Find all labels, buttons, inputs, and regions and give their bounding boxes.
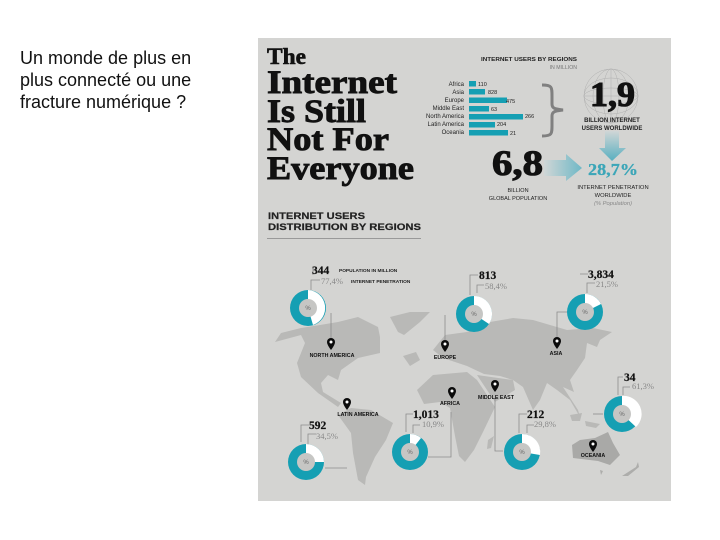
label: Asia stats: 3,834 (588, 269, 614, 281)
label: Middle East stats: 29,8% (534, 419, 556, 429)
donut: North America: % (305, 306, 311, 312)
title: Is Still (267, 94, 366, 130)
stat: 6,8 billion: GLOBAL POPULATION (489, 196, 547, 202)
region labels: North America (426, 114, 465, 120)
stat: 28,7%: INTERNET PENETRATION (577, 185, 649, 191)
stat: 6,8 billion: BILLION (507, 188, 529, 194)
label: Africa stats: 1,013 (413, 409, 439, 421)
bar values: 204 (497, 122, 506, 128)
pin: Oceania: OCEANIA (581, 453, 605, 459)
pin: Oceania (581, 440, 605, 459)
label: North America stats: POPULATION IN MILLION (339, 268, 398, 274)
stat: 28,7%: WORLDWIDE (595, 193, 631, 199)
title: Not For (267, 122, 389, 158)
stat: 28,7% (577, 160, 649, 207)
donut: Middle East: % (519, 450, 525, 456)
pin: Europe (434, 340, 457, 361)
text block: slide caption: Un monde de plus en (20, 48, 191, 68)
text block: slide caption: plus connecté ou une (20, 70, 191, 90)
pin: Africa: AFRICA (440, 401, 460, 407)
region labels: Latin America (428, 122, 465, 128)
pin: Middle East (478, 380, 515, 401)
pin: Asia (550, 337, 563, 357)
text block: slide caption (20, 48, 191, 112)
region labels: Africa (449, 82, 465, 88)
bar values: 266 (525, 114, 534, 120)
region labels (426, 82, 465, 136)
donut: Middle East (504, 434, 540, 470)
donut: Europe: % (471, 312, 477, 318)
stat: 1,9 billion (582, 75, 642, 132)
heading: distribution by regions: DISTRIBUTION BY REGIONS (268, 222, 421, 233)
label: Latin America stats: 592 (309, 420, 326, 432)
title: The (267, 44, 306, 69)
text block: slide caption: fracture numérique ? (20, 92, 186, 112)
world map (275, 312, 639, 485)
heading: users by regions (481, 57, 578, 71)
bar values: 110 (478, 82, 487, 88)
pin: Asia: ASIA (550, 351, 563, 357)
heading: distribution by regions (267, 211, 421, 239)
icon: curly brace (542, 85, 563, 136)
label: Oceania stats: 34 (624, 372, 636, 384)
label: North America stats: INTERNET PENETRATION (351, 279, 411, 285)
label: North America stats (312, 265, 411, 286)
label: Latin America stats (309, 420, 338, 441)
donut: Latin America (288, 444, 324, 480)
label: Middle East stats (527, 409, 556, 429)
donut: Asia (567, 294, 603, 330)
pin: Europe: EUROPE (434, 355, 457, 361)
label: Asia stats (588, 269, 618, 289)
donut: Oceania (604, 396, 642, 432)
region labels: Europe (445, 98, 465, 104)
stat: 6,8 billion (489, 143, 547, 202)
label: Oceania stats (624, 372, 654, 391)
stat: 28,7%: (% Population) (594, 201, 632, 207)
label: North America stats: 77,4% (321, 276, 343, 286)
donut: Oceania: % (619, 412, 625, 418)
stat: 1,9 billion: BILLION INTERNET (584, 118, 640, 124)
bar values: 828 (488, 90, 497, 96)
stat: 6,8 billion: 6,8 (492, 143, 543, 183)
heading: users by regions: IN MILLION (550, 65, 577, 71)
bar chart: users by region (426, 81, 534, 137)
bar values (478, 82, 534, 137)
heading: users by regions: INTERNET USERS BY REGIONS (481, 57, 578, 63)
label: Oceania stats: 61,3% (632, 381, 654, 391)
icon: globe (584, 69, 638, 123)
region labels: Middle East (433, 106, 464, 112)
label: Europe stats (479, 270, 507, 291)
pin: Middle East: MIDDLE EAST (478, 395, 515, 401)
arrow: right (544, 154, 582, 181)
pin: Latin America (337, 398, 379, 418)
heading: distribution by regions: INTERNET USERS (268, 211, 365, 222)
pin: Latin America: LATIN AMERICA (337, 412, 379, 418)
label: Europe stats: 813 (479, 270, 496, 282)
label: North America stats: 344 (312, 265, 330, 277)
region labels: Asia (452, 90, 465, 96)
stat: 1,9 billion: USERS WORLDWIDE (582, 126, 642, 132)
pin: North America (310, 338, 355, 359)
title: Everyone (267, 151, 414, 187)
label: Latin America stats: 34,5% (316, 431, 338, 441)
bar values: 21 (510, 131, 516, 137)
donut: North America (290, 290, 326, 326)
donut: Europe (456, 296, 492, 332)
leader lines (301, 267, 630, 468)
donut: Latin America: % (303, 460, 309, 466)
label: Europe stats: 58,4% (485, 281, 507, 291)
label: Asia stats: 21,5% (596, 279, 618, 289)
region labels: Oceania (442, 130, 465, 136)
label: Africa stats (413, 409, 444, 429)
bar values: 475 (506, 99, 515, 105)
label: Middle East stats: 212 (527, 409, 544, 421)
stat: 1,9 billion: 1,9 (590, 75, 635, 114)
bars (469, 81, 523, 136)
title (267, 44, 414, 187)
pin: Africa (440, 387, 460, 407)
arrow: down (599, 131, 626, 161)
panel: poster background (258, 38, 671, 501)
bar values: 63 (491, 107, 497, 113)
label: Africa stats: 10,9% (422, 419, 444, 429)
pin: North America: NORTH AMERICA (310, 353, 355, 359)
donut: Asia: % (582, 310, 588, 316)
donut: Africa (392, 434, 428, 470)
donut: Africa: % (407, 450, 413, 456)
title: Internet (267, 65, 397, 101)
stat: 28,7%: 28,7% (588, 160, 638, 179)
